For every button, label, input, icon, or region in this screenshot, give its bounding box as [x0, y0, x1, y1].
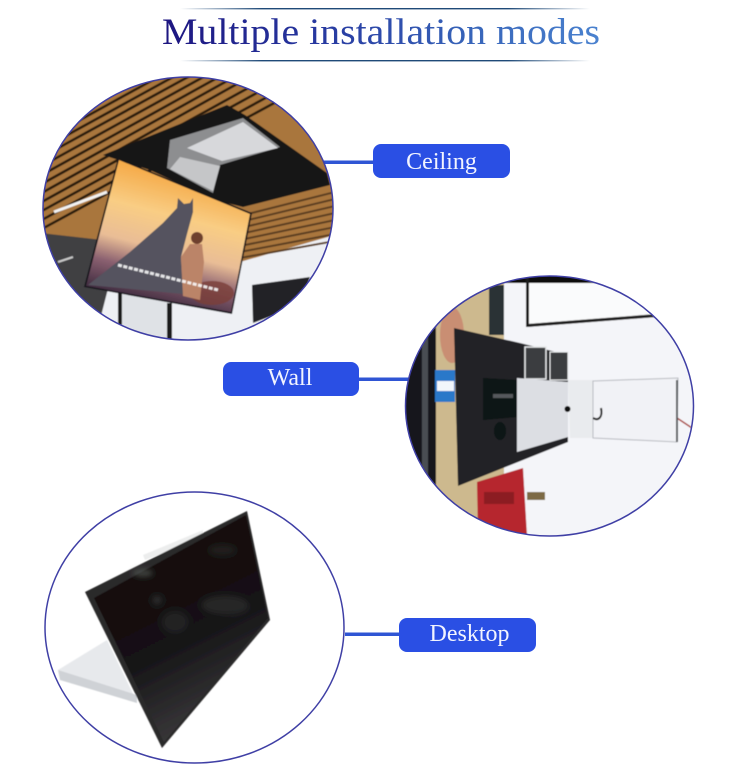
panel: ceiling mode	[42, 76, 510, 341]
label: Desktop	[399, 618, 536, 652]
photo: ceiling-mounted screen	[42, 76, 334, 341]
connector: wall	[359, 378, 411, 381]
panel: desktop mode	[45, 492, 536, 763]
panel: wall mode	[223, 273, 698, 539]
photo: wall-mounted screen	[403, 273, 698, 539]
photo: desktop-mounted screen	[45, 492, 344, 763]
label: Desktop: Desktop	[430, 621, 510, 647]
title: Multiple installation modes	[162, 12, 600, 53]
connector: desktop	[345, 632, 400, 636]
label: Ceiling: Ceiling	[406, 149, 477, 175]
connector: ceiling	[322, 160, 374, 164]
label: Ceiling	[373, 144, 510, 178]
label: Wall: Wall	[268, 365, 313, 391]
label: Wall	[223, 362, 359, 396]
